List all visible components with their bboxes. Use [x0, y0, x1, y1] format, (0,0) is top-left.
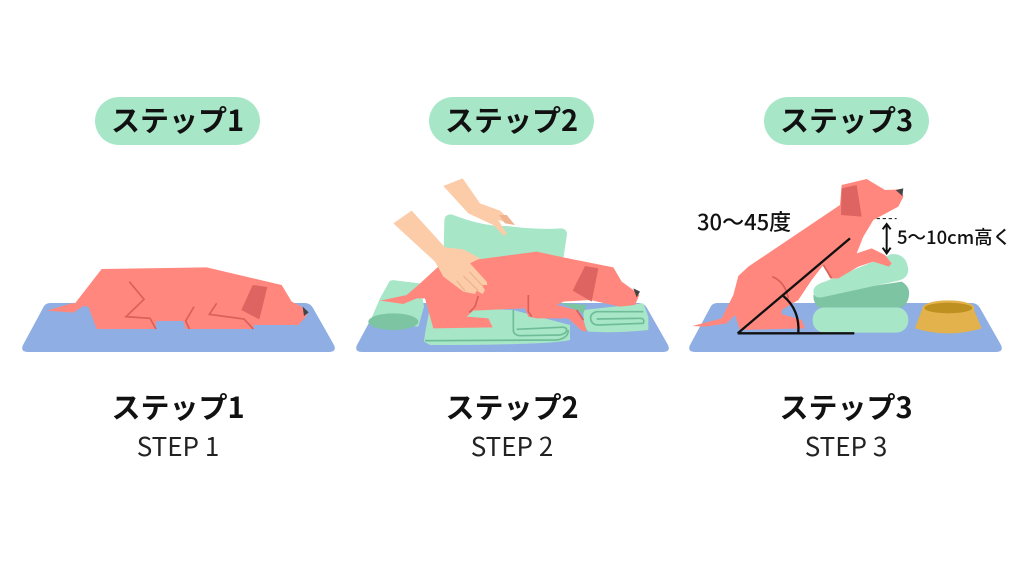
- hands: [393, 178, 515, 294]
- panel: step 3: [689, 97, 1011, 464]
- label: angle: 30～45度: [697, 205, 791, 237]
- angle lines: [738, 238, 854, 333]
- caption: STEP 1: [137, 427, 219, 464]
- caption: ステップ2: [445, 385, 579, 427]
- blue mat: [689, 303, 1002, 352]
- caption: STEP 3: [805, 427, 887, 464]
- panel: step 2: [356, 97, 669, 464]
- blue mat: [22, 303, 335, 352]
- food bowl: [915, 300, 982, 333]
- height arrow: [877, 219, 897, 253]
- caption: [779, 385, 913, 464]
- caption: ステップ1: [111, 385, 245, 427]
- panel: step 1: [22, 97, 335, 464]
- step 2 badge: ステップ2: [445, 98, 578, 140]
- label: height: 5～10cm高く: [897, 224, 1011, 250]
- dog lying down: [47, 267, 309, 329]
- caption: STEP 2: [471, 427, 553, 464]
- caption: [111, 385, 245, 464]
- step 3 badge: ステップ3: [780, 98, 913, 140]
- dog lying on towels: [380, 252, 640, 332]
- blue mat: [356, 303, 669, 352]
- sitting dog: [692, 179, 903, 330]
- caption: [445, 385, 579, 464]
- pillow: [443, 214, 567, 268]
- step 1 badge: ステップ1: [111, 98, 244, 140]
- stacked towels: [813, 254, 909, 333]
- rolled towel: [368, 280, 424, 330]
- caption: ステップ3: [779, 385, 913, 427]
- folded towels: [424, 303, 648, 345]
